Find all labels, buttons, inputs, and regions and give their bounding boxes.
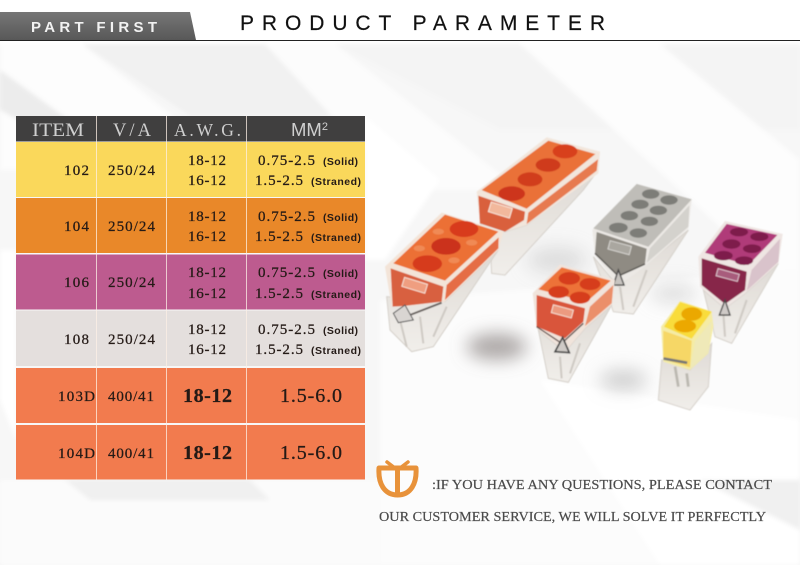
row 102: 18-12 (188, 153, 226, 169)
row 102: 102 (64, 163, 89, 179)
contact message line 2: OUR CUSTOMER SERVICE, WE WILL SOLVE IT PERFECTLY (379, 510, 766, 525)
row 108: 250/24 (108, 332, 156, 348)
row 104: 104 (64, 219, 90, 235)
connector: 6-hole purple (698, 221, 783, 343)
row 103D: 18-12 (183, 385, 232, 407)
connector: 4-hole long orange (477, 137, 600, 275)
row 106: (Solid) (323, 268, 358, 280)
row 106: 18-12 (188, 265, 226, 281)
connector: 8-hole grey (592, 184, 692, 314)
parameter table (16, 116, 365, 480)
table header row: MM (291, 119, 322, 140)
connector: 2-hole yellow (658, 301, 713, 410)
table header row: A.W.G. (174, 120, 241, 140)
row 104 (16, 198, 365, 253)
row 103D: 103D (58, 389, 95, 405)
row 102 (16, 142, 365, 197)
row 106: 0.75-2.5 (258, 265, 315, 281)
row 104: (Solid) (323, 212, 358, 224)
row 102: 0.75-2.5 (258, 153, 315, 169)
row 108: 0.75-2.5 (258, 322, 315, 338)
row 106: 1.5-2.5 (255, 286, 303, 302)
connector: 4-hole small orange (533, 264, 615, 382)
table header row: ITEM (32, 121, 84, 141)
row 108: 18-12 (188, 322, 226, 338)
row 104: 18-12 (188, 209, 226, 225)
row 106: 250/24 (108, 275, 156, 291)
product photo: connectors (385, 137, 783, 410)
row 104: 1.5-2.5 (255, 229, 303, 245)
row 102: (Straned) (311, 176, 361, 188)
row 104D: 18-12 (183, 442, 232, 464)
header band: part first: PART FIRST (31, 19, 157, 36)
table header row (16, 116, 365, 142)
table header row: 2 (322, 121, 328, 133)
row 104: 0.75-2.5 (258, 209, 315, 225)
row 103D: 1.5-6.0 (280, 385, 342, 407)
row 103D: 400/41 (108, 389, 154, 405)
heading: product parameter: PRODUCT PARAMETER (240, 12, 605, 35)
contact message line 1: :IF YOU HAVE ANY QUESTIONS, PLEASE CONTACT (432, 478, 772, 493)
row 104: (Straned) (311, 232, 361, 244)
row 102: (Solid) (323, 156, 358, 168)
row 104D: 104D (58, 446, 95, 462)
row 108: (Solid) (323, 325, 358, 337)
row 106 (16, 254, 365, 310)
row 104: 16-12 (188, 229, 226, 245)
row 104: 250/24 (108, 219, 156, 235)
row 102: 250/24 (108, 163, 156, 179)
row 106: 16-12 (188, 286, 226, 302)
row 108 (16, 310, 365, 366)
row 104D (16, 425, 365, 480)
row 104D: 1.5-6.0 (280, 442, 342, 464)
row 104D: 400/41 (108, 446, 154, 462)
row 102: 1.5-2.5 (255, 173, 303, 189)
table header row: V/A (113, 121, 152, 141)
row 106: (Straned) (311, 289, 361, 301)
row 108: 1.5-2.5 (255, 342, 303, 358)
connector: 3-hole large orange (385, 213, 503, 352)
row 106: 106 (64, 275, 90, 291)
row 103D (16, 368, 365, 423)
icon: orange logo (379, 462, 416, 495)
row 108: (Straned) (311, 345, 361, 357)
floor shadows (467, 247, 697, 390)
row 102: 16-12 (188, 173, 226, 189)
row 108: 16-12 (188, 342, 226, 358)
row 108: 108 (64, 332, 89, 348)
header band: part first (0, 12, 196, 40)
